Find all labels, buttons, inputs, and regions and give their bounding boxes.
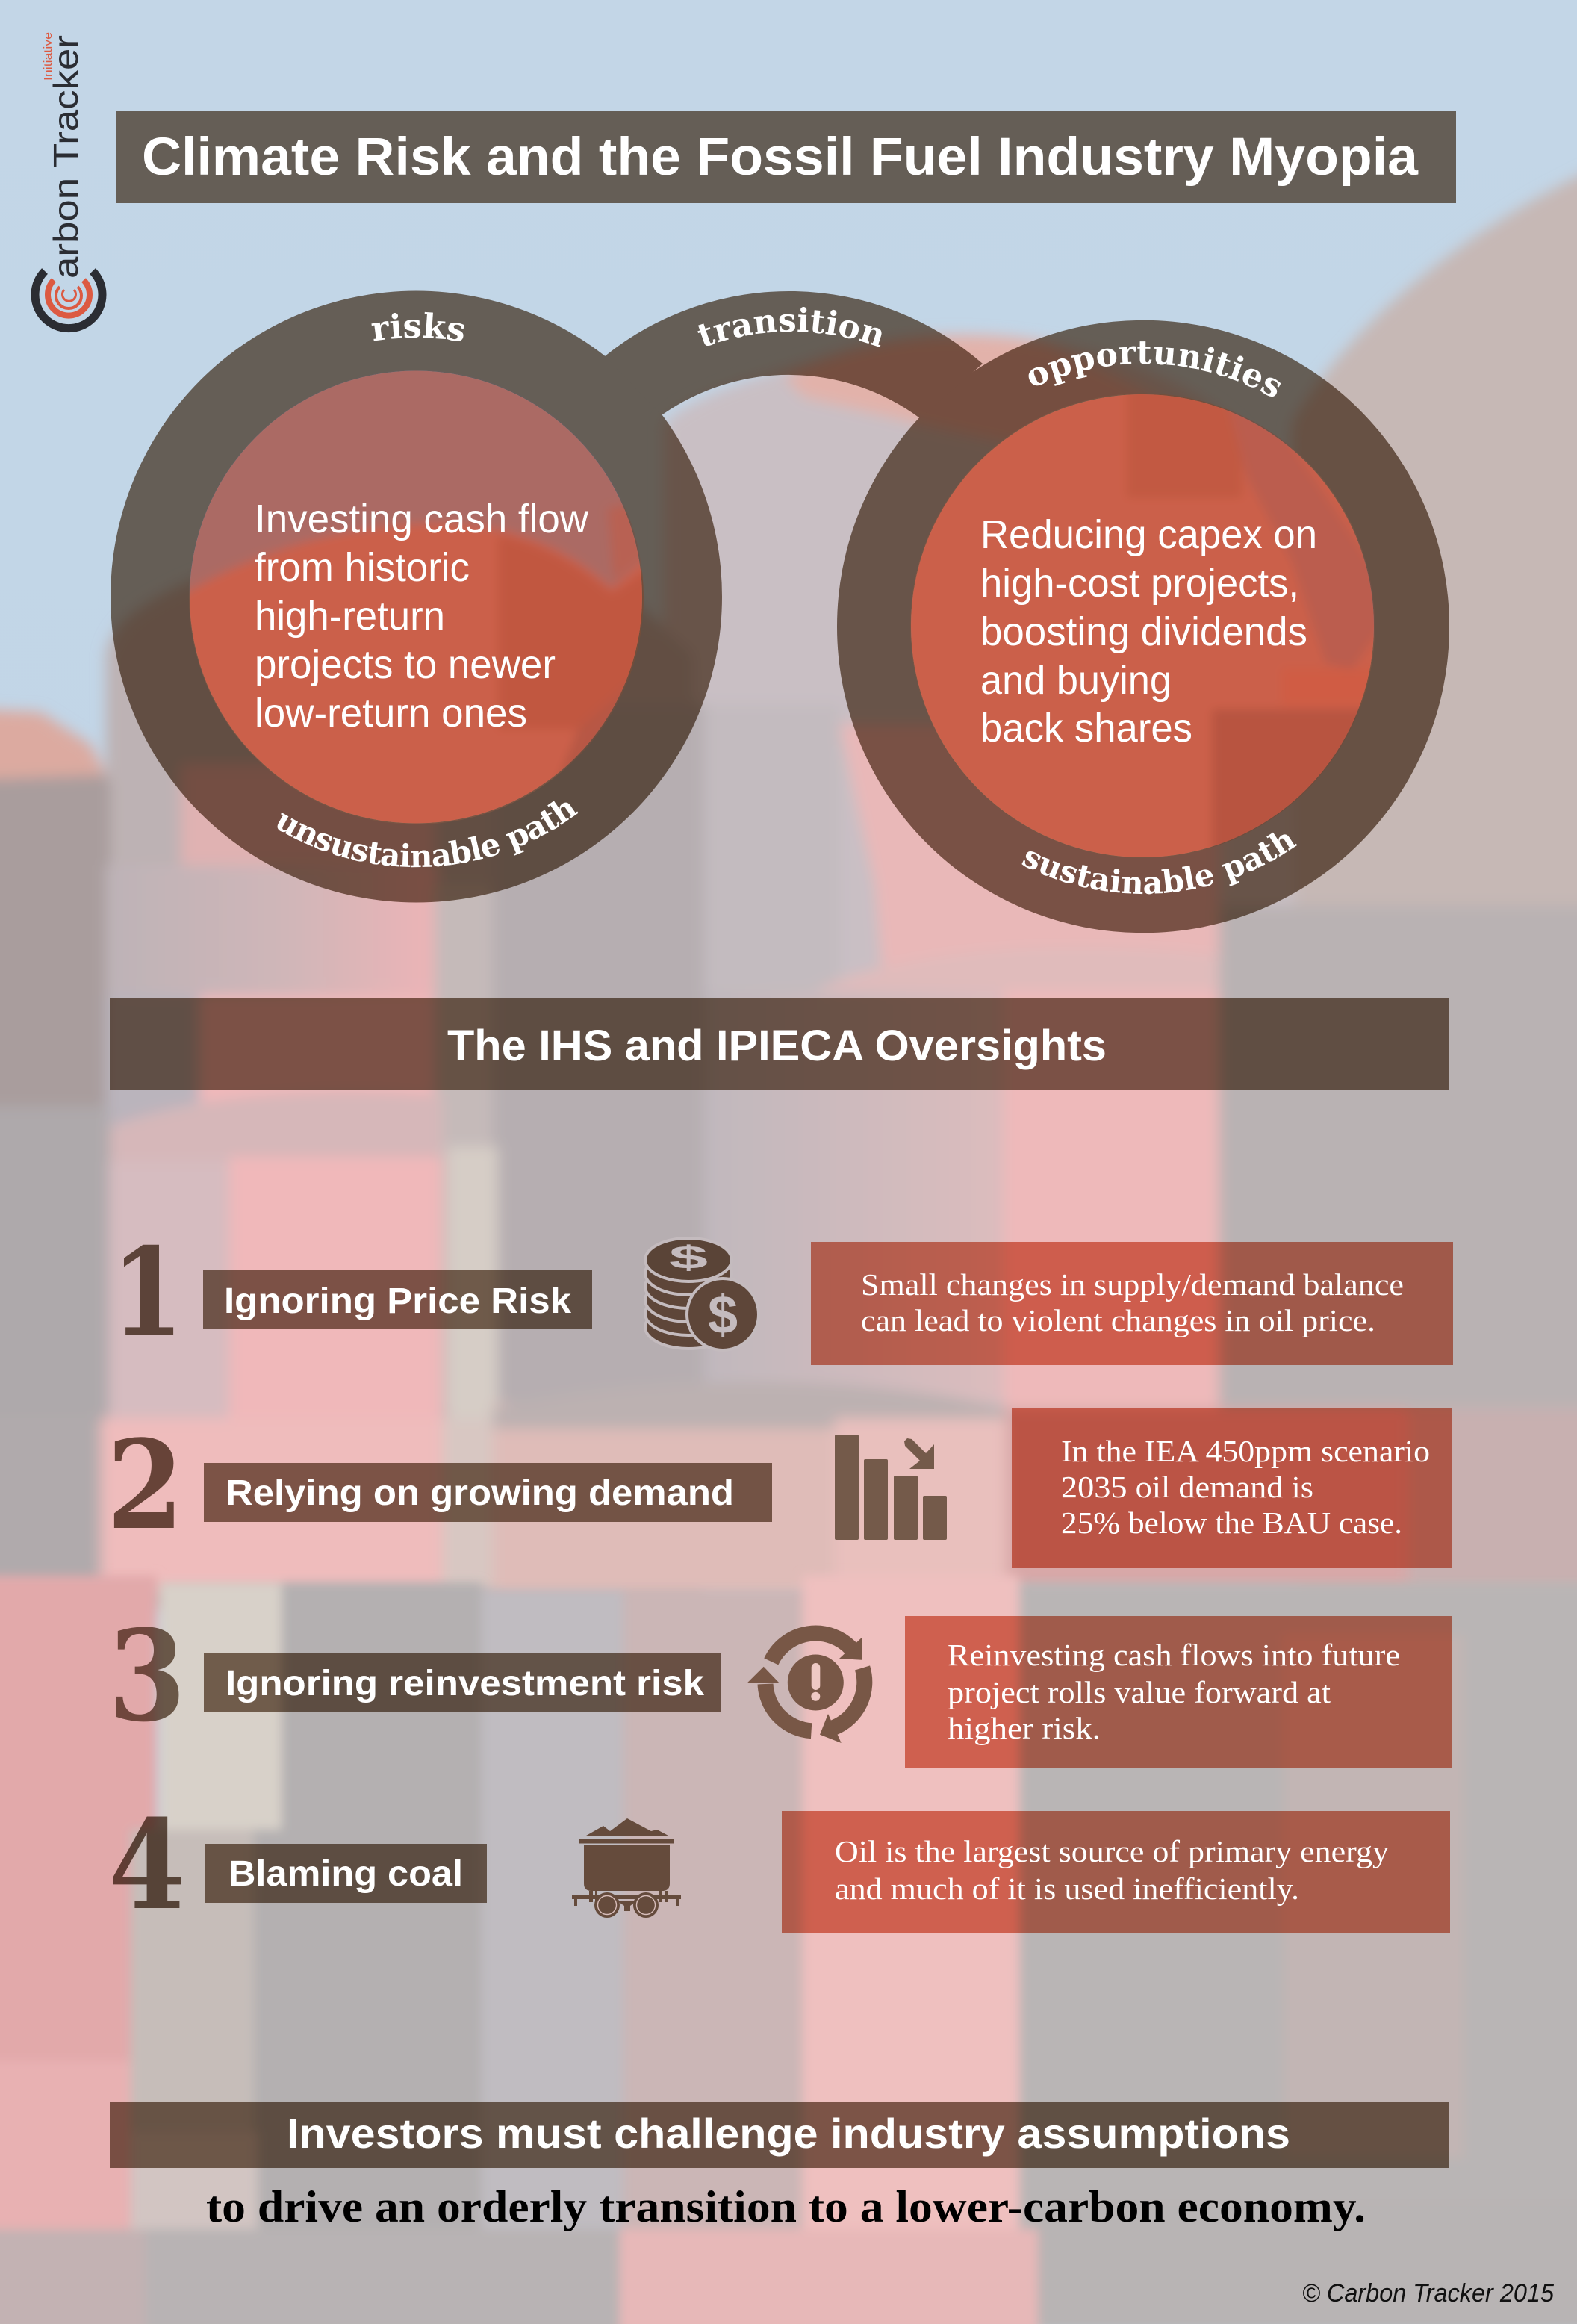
right inner circle (911, 394, 1374, 857)
left barrel (105, 529, 704, 1609)
text: risks description: Investing cash flow (255, 497, 589, 541)
logo: Carbon Tracker Initiative: Initiative (42, 32, 55, 81)
description box: can lead to violent changes in oil price. (861, 1303, 1375, 1337)
description box: In the IEA 450ppm scenario (1061, 1434, 1430, 1468)
middle barrel (664, 335, 1298, 1609)
lower background columns (0, 1576, 1577, 2324)
copyright: © Carbon Tracker 2015 (1302, 2279, 1554, 2308)
label bar: Ignoring reinvestment risk (225, 1664, 704, 1703)
text: risks description: projects to newer (255, 642, 556, 687)
conclusion text: to drive an orderly transition to a lower-carbon economy. (206, 2182, 1366, 2231)
title bar (116, 111, 1456, 203)
logo: Carbon Tracker Initiative: arbon Tracker (46, 35, 85, 279)
label: sustainable path: sustainable path (1021, 832, 1298, 895)
row 1: Ignoring Price Risk (111, 1222, 1453, 1365)
logo: Carbon Tracker Initiative (35, 32, 102, 329)
description box: Small changes in supply/demand balance (861, 1267, 1404, 1302)
description box (782, 1811, 1450, 1933)
text: opportunities description: high-cost projects, (980, 561, 1299, 606)
description box: Reinvesting cash flows into future (948, 1638, 1400, 1672)
left inner circle (190, 370, 642, 823)
description box (811, 1242, 1453, 1365)
under right inner circle (910, 394, 1375, 847)
text: risks description: from historic (255, 545, 470, 590)
text: opportunities description: and buying (980, 658, 1172, 703)
label bar (204, 1463, 772, 1522)
panel: dark rings and transition band (111, 291, 1449, 933)
number 1: 1 (111, 1222, 184, 1364)
label: opportunities: opportunities (1029, 341, 1281, 397)
text: risks description: low-return ones (255, 691, 527, 736)
far left barrel (0, 709, 111, 1116)
text: risks description: high-return (255, 594, 445, 639)
diagram: risks and opportunities circles joined by transition band (111, 291, 1449, 933)
icon: coin stack (645, 1238, 759, 1350)
description box: and much of it is used inefficiently. (835, 1871, 1299, 1906)
far right barrel (1237, 166, 1577, 1609)
conclusion bar: Investors must challenge industry assumptions (287, 2110, 1290, 2157)
heading: The IHS and IPIECA Oversights: The IHS and IPIECA Oversights (447, 1022, 1107, 1070)
text: opportunities description: Reducing capex on (980, 512, 1317, 557)
icon: coin stack: $ (708, 1285, 738, 1345)
heading: The IHS and IPIECA Oversights (110, 998, 1449, 1090)
mid columns (704, 704, 840, 996)
text: opportunities description: boosting dividends (980, 609, 1307, 654)
conclusion bar (110, 2102, 1449, 2168)
number 4: 4 (108, 1792, 186, 1937)
icon: coal cart (572, 1818, 681, 1918)
label bar: Blaming coal (228, 1854, 463, 1894)
description box: 2035 oil demand is (1061, 1470, 1313, 1504)
description box (905, 1616, 1452, 1768)
label: risks: risks (372, 312, 464, 341)
description box: higher risk. (948, 1711, 1101, 1745)
description box: project rolls value forward at (948, 1675, 1331, 1709)
description box: Oil is the largest source of primary energy (835, 1834, 1390, 1868)
title bar: Climate Risk and the Fossil Fuel Industry Myopia (142, 128, 1419, 187)
label: unsustainable path: unsustainable path (278, 801, 579, 868)
label bar (205, 1844, 487, 1903)
text: opportunities description: back shares (980, 706, 1192, 751)
label bar (204, 1653, 721, 1712)
icon: warning cycle arrows (747, 1633, 865, 1743)
number 2: 2 (107, 1413, 184, 1557)
row 2: Relying on growing demand (107, 1408, 1452, 1568)
icon: falling bar chart (835, 1435, 947, 1540)
label bar: Ignoring Price Risk (224, 1281, 571, 1321)
text: risks description (255, 497, 589, 736)
bottom of upper area (0, 1418, 101, 1589)
text: opportunities description (980, 512, 1317, 751)
label bar: Relying on growing demand (225, 1473, 734, 1513)
lower-left columns (181, 765, 435, 905)
number 3: 3 (108, 1602, 186, 1750)
icon: coin stack: $ (669, 1240, 708, 1276)
description box (1012, 1408, 1452, 1568)
label: transition: transition (697, 307, 882, 347)
label bar (203, 1270, 592, 1329)
row 4: Blaming coal (108, 1792, 1450, 1937)
under left inner circle (189, 503, 644, 824)
description box: 25% below the BAU case. (1061, 1506, 1402, 1540)
row 3: Ignoring reinvestment risk (108, 1602, 1452, 1768)
